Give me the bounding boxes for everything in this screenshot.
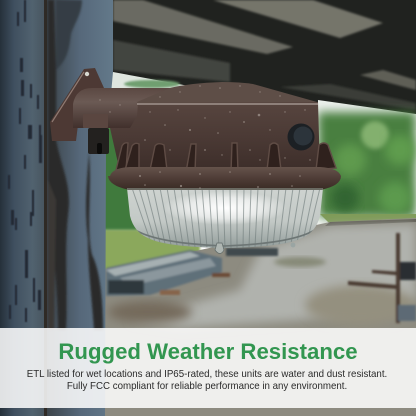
text block: description: [27, 369, 387, 392]
background: grass and wet concrete: [100, 214, 416, 416]
water drop hanging from lens: [215, 243, 295, 254]
lamp: housing: [73, 82, 341, 193]
lamp: dark photocell button: [288, 124, 314, 150]
post: left face: [0, 0, 48, 416]
arm lug: [83, 114, 108, 128]
lamp: mounting bolt block: [88, 128, 109, 154]
background: rusty rack at right: [348, 233, 416, 323]
cooling fins: [116, 143, 336, 172]
text block: description: Fully FCC compliant for reliable performance in any environment.: [67, 381, 347, 392]
background: trees and sky: [100, 70, 416, 232]
water droplets on housing: [99, 85, 311, 189]
main body: [110, 102, 320, 172]
arm: [73, 88, 185, 128]
text block: description: ETL listed for wet locations and IP65-rated, these units are water and dust resistant.: [27, 369, 387, 380]
lamp: ribbed glass lens: [127, 188, 323, 248]
post: right face with dark water stains: [47, 0, 113, 416]
dome top: [137, 82, 318, 106]
heading: Rugged Weather Resistance: [58, 339, 358, 364]
panel: caption: [0, 328, 416, 408]
background: stacked metal rails: [106, 248, 278, 296]
flange: [108, 167, 341, 193]
background: ceiling: [100, 0, 416, 125]
lamp: mounting bracket: [50, 68, 104, 141]
